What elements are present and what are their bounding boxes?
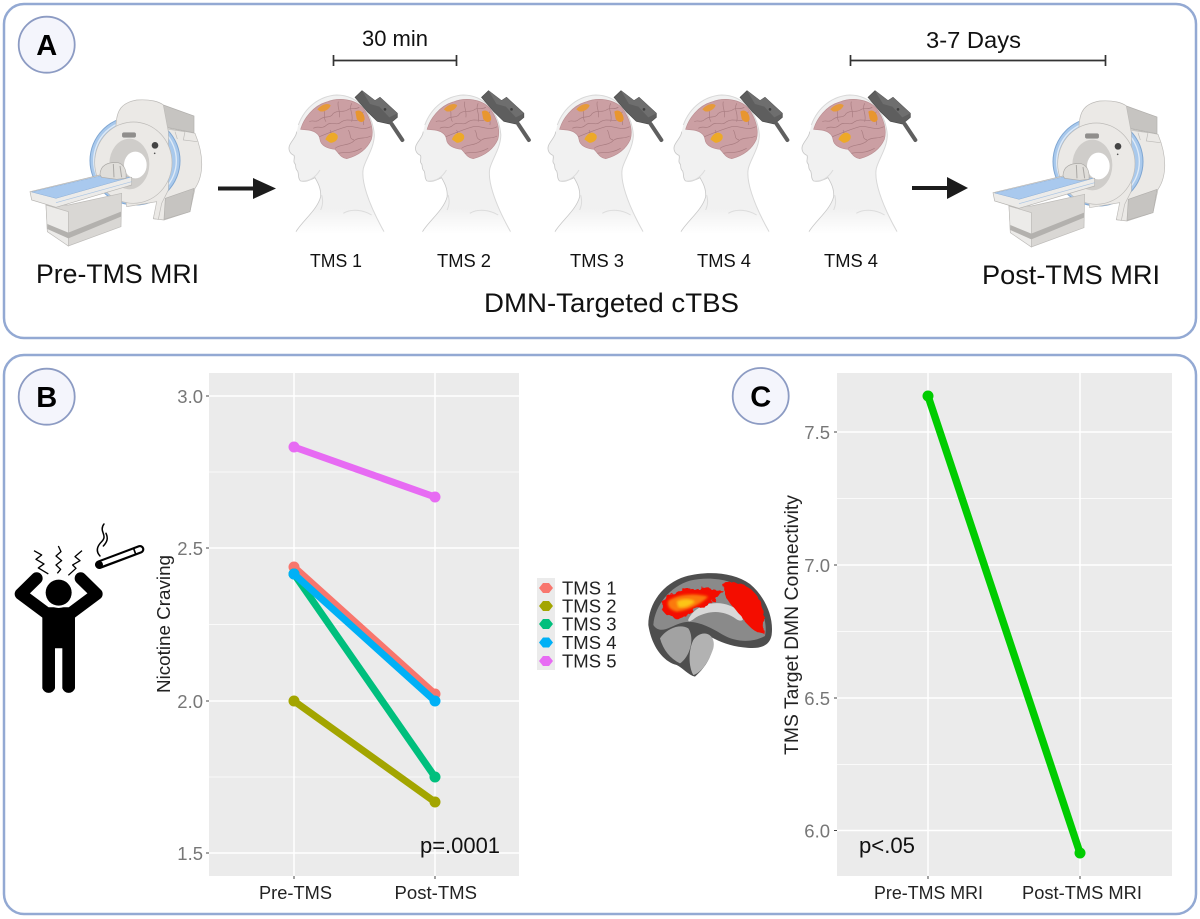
x axis labels	[874, 883, 1142, 903]
plot background	[209, 373, 519, 876]
y axis tick labels: 1.5	[177, 843, 203, 864]
chart: nicotine craving pre vs post TMS	[154, 373, 519, 903]
y axis tick labels: 2.0	[177, 691, 203, 712]
legend: TMS sessions	[537, 578, 616, 672]
y axis tick labels: 6.5	[804, 688, 830, 709]
icon: head with TMS coil, session 5	[802, 91, 915, 234]
icon: head with TMS coil, session 2	[415, 91, 529, 234]
label: Pre-TMS MRI: Pre-TMS MRI	[36, 259, 199, 289]
label: TMS 2: TMS 2	[437, 251, 491, 271]
icon: head with TMS coil, session 1	[289, 91, 402, 234]
y axis tick labels: 7.0	[804, 555, 830, 576]
badge B: B	[36, 382, 57, 414]
legend key TMS 5: TMS 5	[562, 650, 616, 672]
series TMS 3	[288, 568, 440, 782]
y axis tick labels	[804, 422, 830, 842]
series: connectivity change	[922, 390, 1086, 858]
series TMS 2	[288, 696, 440, 808]
icon: stressed person craving a cigarette	[21, 524, 140, 693]
badge C	[733, 368, 789, 424]
y axis tick labels: 6.0	[804, 820, 830, 842]
badge A: A	[36, 30, 57, 62]
x axis labels: Post-TMS MRI	[1022, 883, 1142, 903]
legend key TMS 4: TMS 4	[562, 632, 616, 653]
panel A frame	[4, 4, 1196, 338]
brain scan: DMN target map	[648, 573, 772, 677]
icon: head with TMS coil, session 3	[548, 91, 661, 234]
label: 30 min: 30 min	[362, 26, 428, 51]
series TMS 1	[288, 562, 440, 700]
y axis title: TMS Target DMN Connectivity	[782, 494, 803, 755]
badge B	[19, 369, 75, 425]
chart: TMS target DMN connectivity	[782, 373, 1172, 903]
arrow: pre MRI to TMS	[218, 178, 276, 199]
stress squiggles	[34, 546, 82, 575]
p value: p=.0001	[420, 833, 500, 858]
icon: head with TMS coil, session 4	[674, 91, 787, 234]
x axis labels: Pre-TMS	[259, 883, 332, 903]
label: TMS 4: TMS 4	[697, 251, 751, 271]
y axis tick labels: 7.5	[804, 422, 830, 443]
badge C: C	[750, 382, 771, 414]
label: TMS 4 (final session): TMS 4	[824, 251, 878, 271]
legend key TMS 2: TMS 2	[562, 596, 616, 616]
panel B and C frame	[4, 355, 1196, 914]
y axis tick labels: 2.5	[177, 538, 203, 559]
cigarette smoke	[97, 524, 107, 556]
legend key TMS 3: TMS 3	[562, 614, 616, 634]
y axis tick labels	[177, 386, 203, 864]
label: TMS 1: TMS 1	[310, 251, 362, 271]
plot background	[837, 373, 1172, 876]
cigarette	[96, 548, 140, 568]
p value: p<.05	[859, 833, 915, 858]
badge A	[19, 17, 75, 73]
label: TMS 3: TMS 3	[570, 251, 624, 271]
series TMS 5	[288, 442, 440, 502]
label: Post-TMS MRI: Post-TMS MRI	[982, 260, 1160, 290]
series TMS 4	[288, 568, 440, 706]
x axis labels: Post-TMS	[394, 883, 477, 903]
label: DMN-Targeted cTBS: DMN-Targeted cTBS	[484, 288, 739, 318]
x axis labels	[259, 883, 477, 903]
default mode network activation	[661, 583, 765, 633]
icon: pre-TMS MRI scanner	[30, 100, 202, 246]
x axis labels: Pre-TMS MRI	[874, 883, 983, 903]
bracket: 3-7 days	[850, 55, 1106, 66]
icon: post-TMS MRI scanner	[993, 101, 1165, 247]
figure body	[21, 577, 97, 693]
arrow: TMS to post MRI	[912, 177, 968, 199]
label: 3-7 Days: 3-7 Days	[926, 27, 1021, 53]
bracket: 30 min	[334, 55, 456, 66]
y axis tick labels: 3.0	[177, 386, 203, 407]
panel A: study timeline	[4, 4, 1196, 338]
y axis title: Nicotine Craving	[154, 555, 174, 693]
legend key TMS 1: TMS 1	[562, 578, 616, 598]
